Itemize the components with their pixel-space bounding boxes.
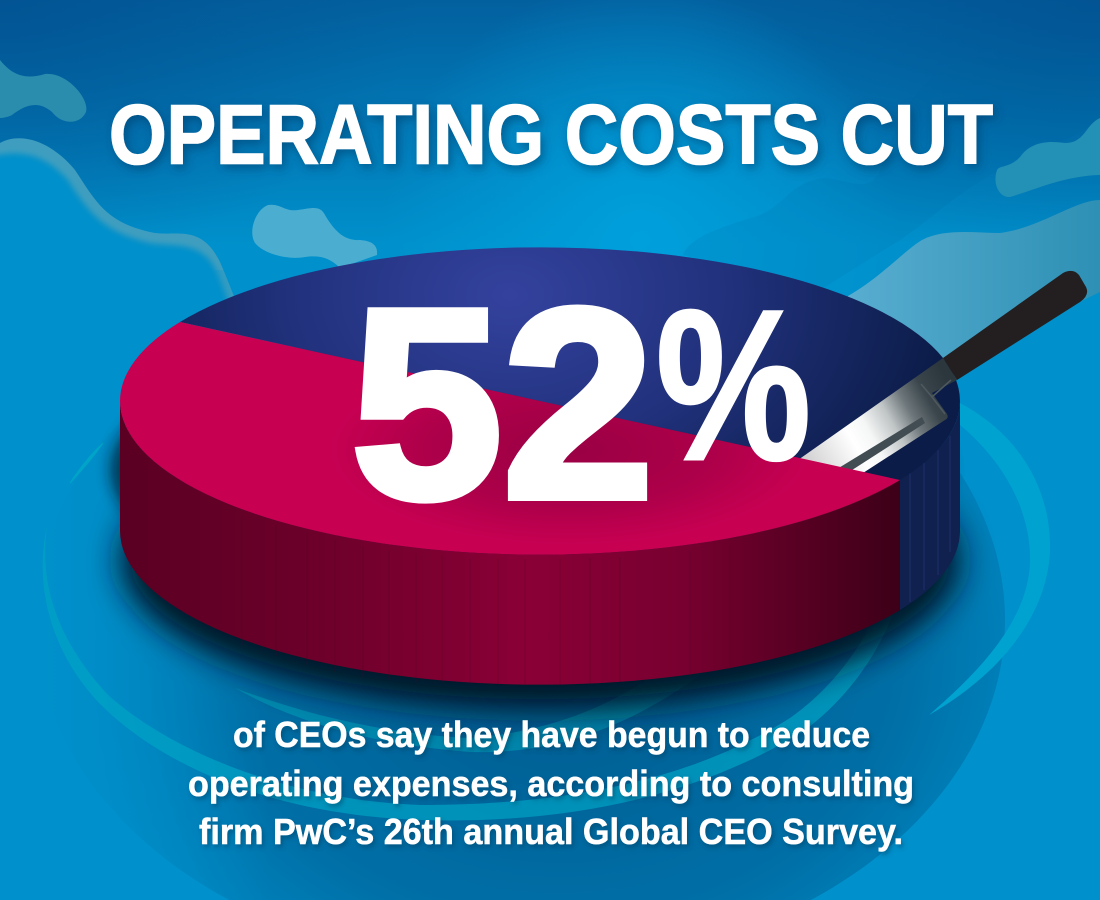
big number: 52 percent: 52 xyxy=(351,254,654,555)
pie shadow xyxy=(110,320,960,710)
description text: of CEOs say they have begun to reduce xyxy=(233,714,870,755)
rings xyxy=(43,403,1050,820)
knife groove xyxy=(837,417,925,472)
blob: right teal xyxy=(995,118,1100,197)
blob: right hill xyxy=(848,200,1100,400)
description text: operating expenses, according to consulting xyxy=(188,763,914,804)
knife bolster lines xyxy=(921,380,951,414)
title: OPERATING COSTS CUT xyxy=(109,88,993,182)
knife handle xyxy=(943,271,1087,380)
big number: 52 percent: % xyxy=(656,266,811,505)
dark pool xyxy=(0,270,1005,900)
knife xyxy=(798,271,1087,473)
pie: blue wall xyxy=(900,401,960,610)
description text: firm PwC’s 26th annual Global CEO Survey. xyxy=(199,811,903,852)
knife blade xyxy=(798,358,957,473)
blob: center xyxy=(252,205,377,268)
pie: blue slice top xyxy=(180,247,960,480)
pie chart xyxy=(120,247,1087,685)
description text xyxy=(188,714,914,852)
pie: red slice top xyxy=(120,322,900,555)
blob: top left xyxy=(0,60,86,122)
blob: left hill xyxy=(0,138,238,335)
big number: 52 percent xyxy=(351,254,811,555)
pie: red shade xyxy=(362,389,776,532)
pie: red wall xyxy=(120,401,900,685)
